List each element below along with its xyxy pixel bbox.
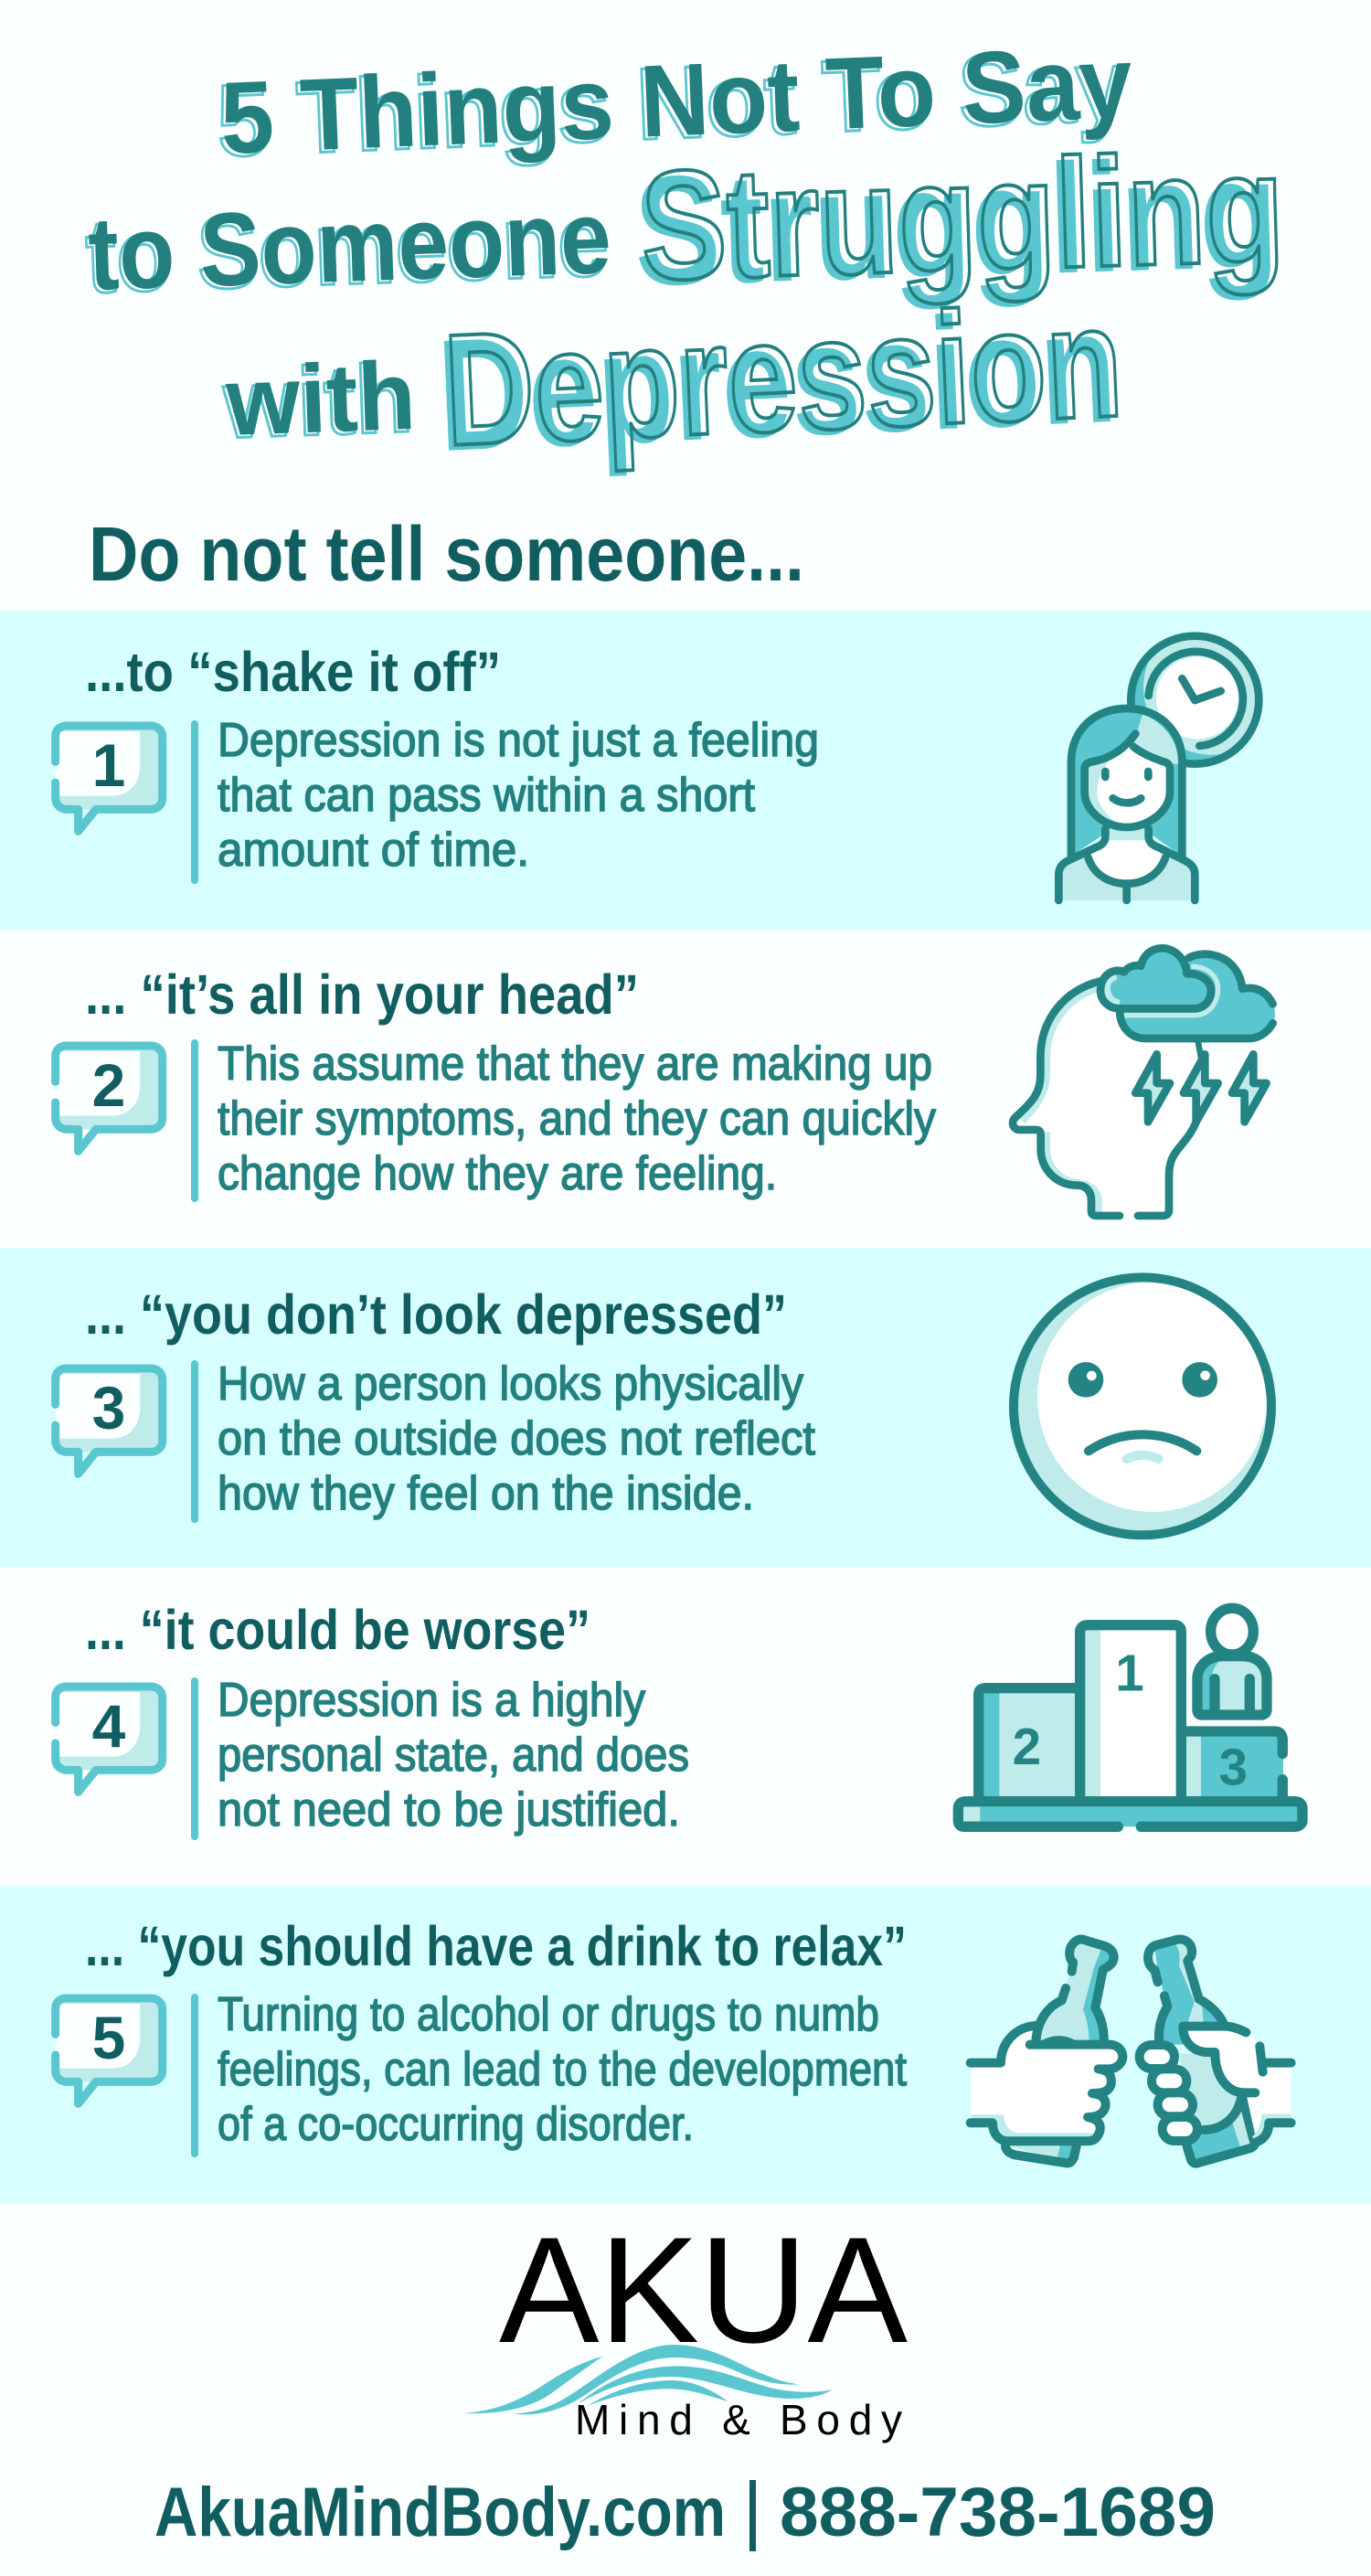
panel: item 1 <box>0 611 1371 930</box>
text block 2: change how they are feeling. <box>218 1147 777 1200</box>
panel: item 3 <box>0 1248 1371 1567</box>
title word: Depression: Depression <box>441 271 1126 479</box>
footer contact line: 888-738-1689 <box>780 2474 1216 2551</box>
icon: podium: 2 <box>1013 1719 1041 1776</box>
text block 1: Depression is not just a feeling <box>218 714 819 767</box>
text block 1: amount of time. <box>218 824 529 877</box>
icon: woman and clock <box>1058 620 1279 900</box>
text block 4 <box>218 1674 689 1836</box>
number badge 5 <box>56 1998 163 2103</box>
footer contact line: AkuaMindBody.com <box>154 2474 726 2551</box>
icon: sad face <box>1014 1277 1277 1535</box>
text block 5: Turning to alcohol or drugs to numb <box>218 1988 879 2041</box>
heading 2: ... “it’s all in your head” <box>85 963 639 1026</box>
number badge 1: 1 <box>92 731 125 799</box>
right bottle <box>1148 1939 1255 2164</box>
text block 3: How a person looks physically <box>218 1357 803 1410</box>
icon: podium: 3 <box>1219 1740 1248 1797</box>
heading 1: ...to “shake it off” <box>85 641 501 703</box>
divider bar 3 <box>191 1360 198 1523</box>
divider bar 5 <box>191 1994 198 2157</box>
left bottle <box>1005 1940 1114 2163</box>
title line 2 lead: to Someone <box>84 182 611 315</box>
number badge 2: 2 <box>92 1051 125 1119</box>
text block 2: their symptoms, and they can quickly <box>218 1092 936 1145</box>
title <box>84 25 1287 484</box>
title word: Depression: Depression <box>434 277 1120 484</box>
text block 5 <box>218 1988 907 2151</box>
logo wordmark: AKUA <box>499 2206 908 2374</box>
text block 4: Depression is a highly <box>218 1674 645 1727</box>
number badge 2 <box>56 1046 163 1151</box>
heading 3: ... “you don’t look depressed” <box>85 1283 787 1346</box>
title line 2 lead: to Someone <box>87 179 613 313</box>
number badge 1 <box>56 726 163 831</box>
text block 1: that can pass within a short <box>218 769 756 822</box>
text block 3: how they feel on the inside. <box>218 1467 754 1520</box>
heading 5: ... “you should have a drink to relax” <box>85 1915 907 1977</box>
number badge 5: 5 <box>92 2004 125 2071</box>
number badge 3: 3 <box>92 1374 125 1442</box>
panel: item 4 <box>56 1599 1302 1840</box>
panel: item 5 <box>0 1886 1371 2204</box>
icon: head with storm clouds <box>1013 948 1275 1216</box>
divider bar 4 <box>191 1677 198 1840</box>
text block 4: not need to be justified. <box>218 1783 680 1836</box>
title line 3 lead: with <box>224 342 418 456</box>
text block 4: personal state, and does <box>218 1729 689 1782</box>
heading 4: ... “it could be worse” <box>85 1599 590 1661</box>
icon: podium <box>958 1608 1302 1826</box>
text block 2: This assume that they are making up <box>218 1038 932 1091</box>
divider bar 1 <box>191 720 198 884</box>
number badge 3 <box>56 1368 163 1474</box>
logo waves <box>464 2345 833 2414</box>
divider bar 2 <box>191 1039 198 1202</box>
text block 3: on the outside does not reflect <box>218 1412 816 1465</box>
panel: item 2 <box>56 948 1275 1216</box>
right hand <box>1140 2027 1291 2142</box>
text block 2 <box>218 1038 936 1200</box>
text block 5: of a co-occurring disorder. <box>218 2098 694 2151</box>
icon: hands clinking bottles <box>971 1939 1291 2164</box>
text block 5: feelings, can lead to the development <box>218 2043 907 2096</box>
icon: podium: 1 <box>1115 1645 1144 1702</box>
title line 1: 5 Things Not To Say <box>218 25 1134 176</box>
title line 3 lead: with <box>221 345 415 459</box>
text block 3 <box>218 1357 816 1520</box>
left hand <box>971 2025 1122 2141</box>
subheading: Do not tell someone... <box>89 511 804 597</box>
logo tagline: Mind & Body <box>575 2396 902 2443</box>
title line 1: 5 Things Not To Say <box>215 27 1131 178</box>
logo <box>464 2206 908 2443</box>
number badge 4 <box>56 1687 163 1792</box>
footer contact line <box>154 2474 1216 2551</box>
number badge 4: 4 <box>92 1692 126 1760</box>
text block 1 <box>218 714 819 877</box>
